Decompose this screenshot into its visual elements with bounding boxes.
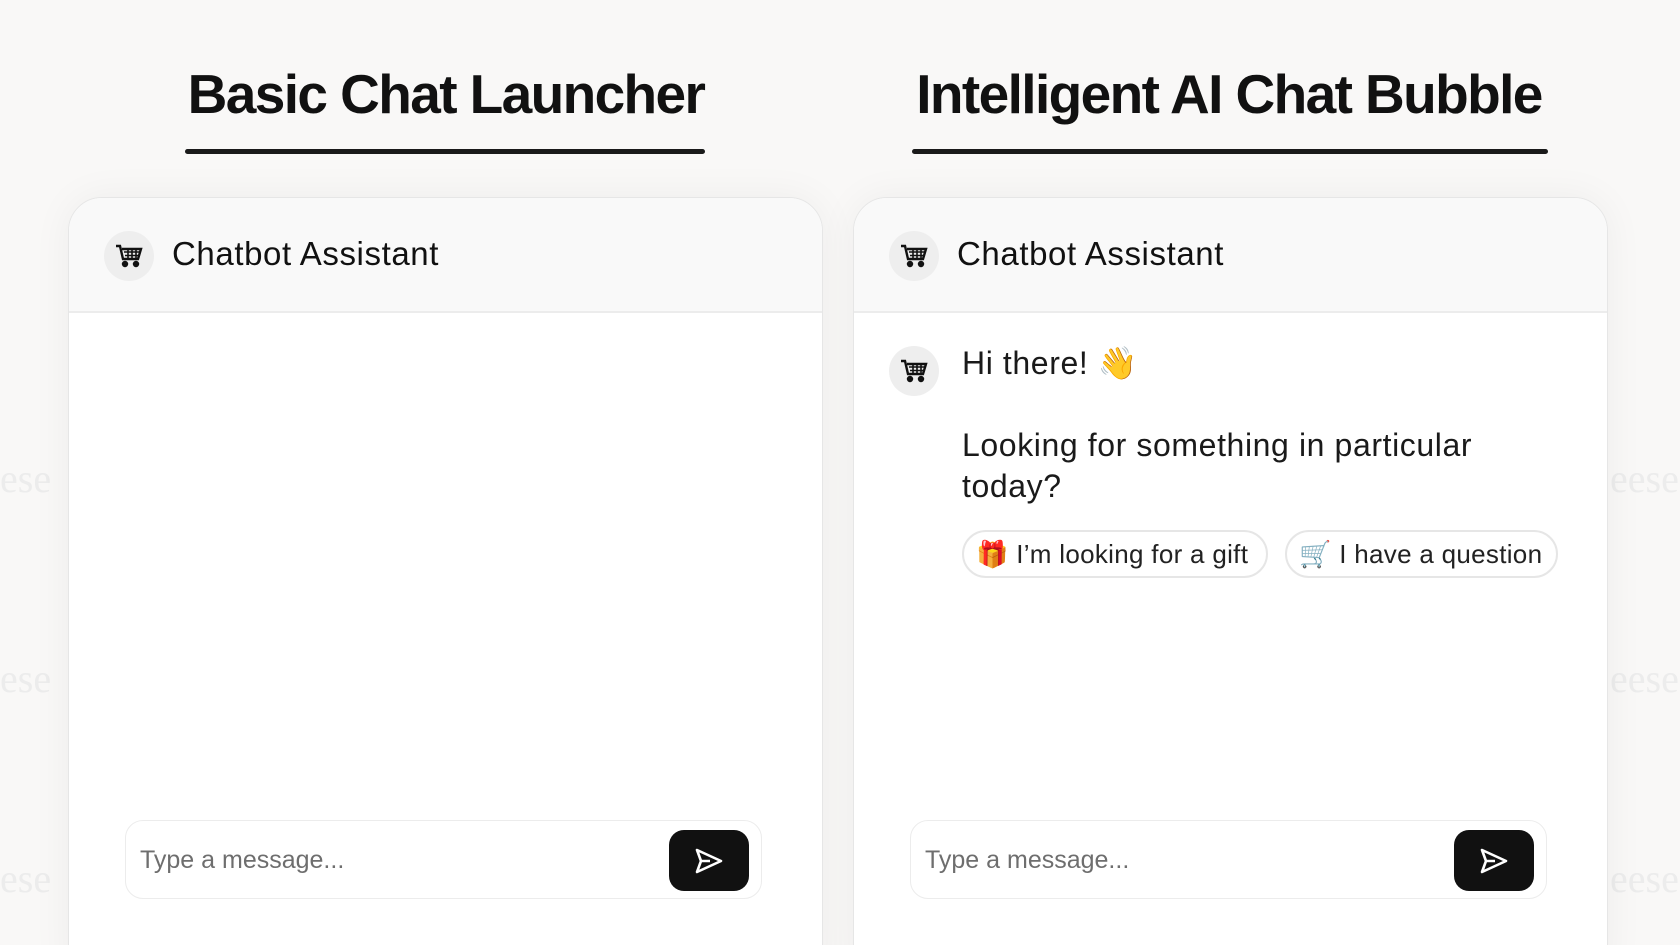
icon: cart avatar bbox=[104, 231, 154, 281]
text: ese bbox=[0, 856, 51, 901]
header: Chatbot Assistant bbox=[172, 235, 439, 272]
panel: intelligent chat: today? bbox=[962, 468, 1062, 504]
chip: question: 🛒 I have a question bbox=[1299, 538, 1542, 568]
chip: gift bbox=[962, 530, 1268, 578]
input box bbox=[910, 820, 1547, 899]
chip: gift: 🎁 I’m looking for a gift bbox=[976, 538, 1248, 568]
icon: cart avatar bbox=[889, 231, 939, 281]
icon: send button bbox=[1454, 830, 1534, 891]
input box bbox=[125, 820, 762, 899]
panel: intelligent chat bbox=[853, 197, 1608, 945]
panel: intelligent chat: Looking for something in particular bbox=[962, 427, 1472, 463]
title: basic chat launcher: Basic Chat Launcher bbox=[188, 63, 704, 125]
icon: send button bbox=[669, 830, 749, 891]
title: intelligent AI chat bubble: Intelligent AI Chat Bubble bbox=[916, 63, 1542, 125]
text: eese bbox=[1610, 856, 1679, 901]
input box: Type a message... bbox=[925, 846, 1129, 874]
header bbox=[69, 198, 822, 313]
text: ese bbox=[0, 456, 51, 501]
message text: Hi there! 👋 bbox=[962, 345, 1138, 381]
header: Chatbot Assistant bbox=[957, 235, 1224, 272]
input box: Type a message... bbox=[140, 846, 344, 874]
text: eese bbox=[1610, 456, 1679, 501]
icon: message avatar bbox=[889, 346, 939, 396]
header bbox=[854, 198, 1607, 313]
text: ese bbox=[0, 656, 51, 701]
chip: question bbox=[1285, 530, 1558, 578]
text: eese bbox=[1610, 656, 1679, 701]
panel: basic chat bbox=[68, 197, 823, 945]
